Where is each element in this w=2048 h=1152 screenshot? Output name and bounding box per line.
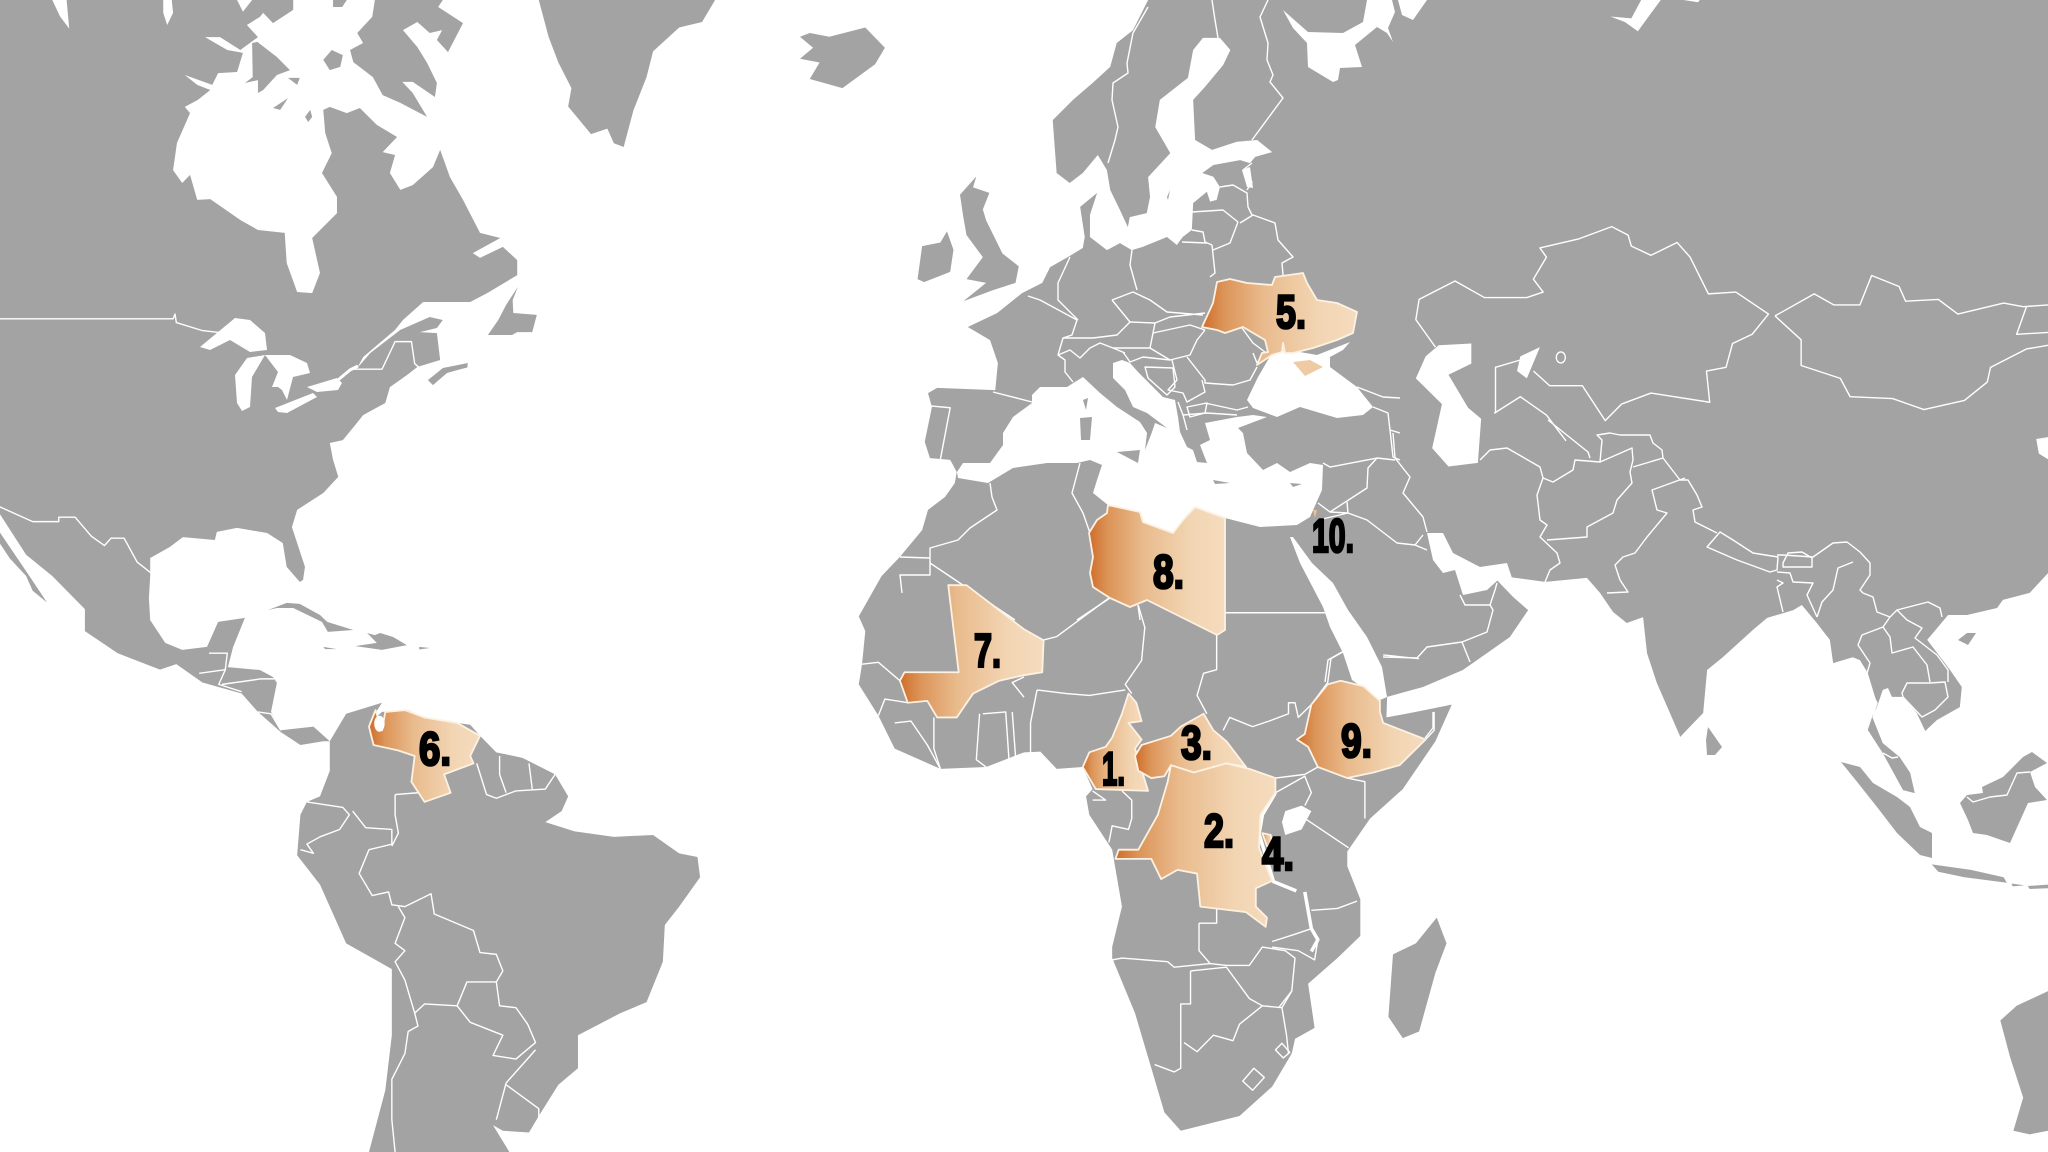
- label 2: 2.: [1204, 804, 1234, 857]
- label 1: 1.: [1102, 742, 1125, 795]
- landmass: Eurasia and Africa: [859, 0, 2048, 1131]
- landmass: British Isles: [918, 176, 1019, 301]
- highlighted country: Burundi: [1262, 833, 1272, 848]
- landmass: Madagascar and Australia: [1388, 864, 2048, 1134]
- label 3: 3.: [1181, 716, 1212, 769]
- lakes: East Africa: [1259, 793, 1318, 951]
- highlighted country: DR Congo: [1115, 763, 1275, 927]
- highlighted country: Ukraine: [1202, 273, 1357, 376]
- label 8: 8.: [1153, 545, 1184, 598]
- highlighted country: Central African Republic: [1135, 714, 1246, 778]
- landmass: Americas: [0, 0, 700, 1152]
- label 4: 4.: [1262, 827, 1294, 880]
- highlighted country: Libya: [1089, 505, 1225, 635]
- inland seas: Caspian, Aral, Balkhash and Arctic gulfs: [1416, 0, 2048, 467]
- islands: Sri Lanka, Hainan, Sumatra, Borneo, Nova Scotia: [428, 363, 2047, 858]
- highlighted country: Cameroon: [1083, 694, 1148, 791]
- label 5: 5.: [1276, 285, 1306, 338]
- Arctic islands cut-outs: [52, 0, 252, 29]
- seas: Mediterranean, Black Sea, Red Sea, Persian Gulf, White Sea: [957, 0, 1512, 700]
- landmass: Greenland: [539, 0, 715, 147]
- highlighted country: Venezuela: [369, 710, 480, 802]
- label 7: 7.: [974, 624, 1001, 677]
- highlighted country: Mali: [900, 585, 1044, 717]
- label 9: 9.: [1341, 714, 1372, 767]
- label 10: 10.: [1312, 509, 1354, 562]
- label 6: 6.: [419, 722, 451, 775]
- highlighted country: Israel: [1313, 510, 1317, 518]
- country borders: Europe, Middle East and Asia: [900, 0, 1948, 758]
- landmass: Iceland: [800, 28, 885, 88]
- great lakes: [200, 318, 358, 413]
- highlighted country: Ethiopia: [1297, 681, 1426, 778]
